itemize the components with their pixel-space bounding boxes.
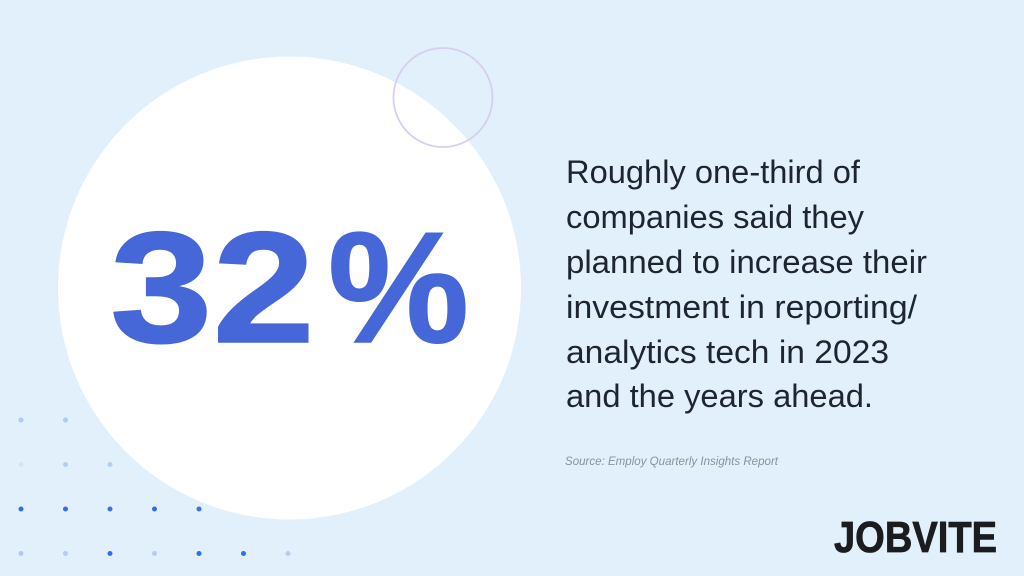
statement text block: analytics tech in 2023 — [566, 334, 889, 370]
statement text block: planned to increase their — [566, 244, 927, 280]
decorative outlined circle — [394, 48, 492, 147]
white circle panel — [58, 56, 521, 520]
statement text block: investment in reporting/ — [566, 289, 917, 325]
Jobvite logo wordmark: JOBVITE — [834, 513, 997, 562]
big statistic: 32%: 32 — [110, 200, 315, 376]
source note: Source: Employ Quarterly Insights Report — [565, 456, 779, 468]
statement text block: companies said they — [566, 199, 864, 235]
statement text block — [566, 154, 927, 414]
dot grid decoration — [18, 418, 290, 556]
statement text block: Roughly one-third of — [566, 154, 860, 190]
statement text block: and the years ahead. — [566, 378, 873, 414]
big statistic: 32%: % — [328, 200, 469, 376]
